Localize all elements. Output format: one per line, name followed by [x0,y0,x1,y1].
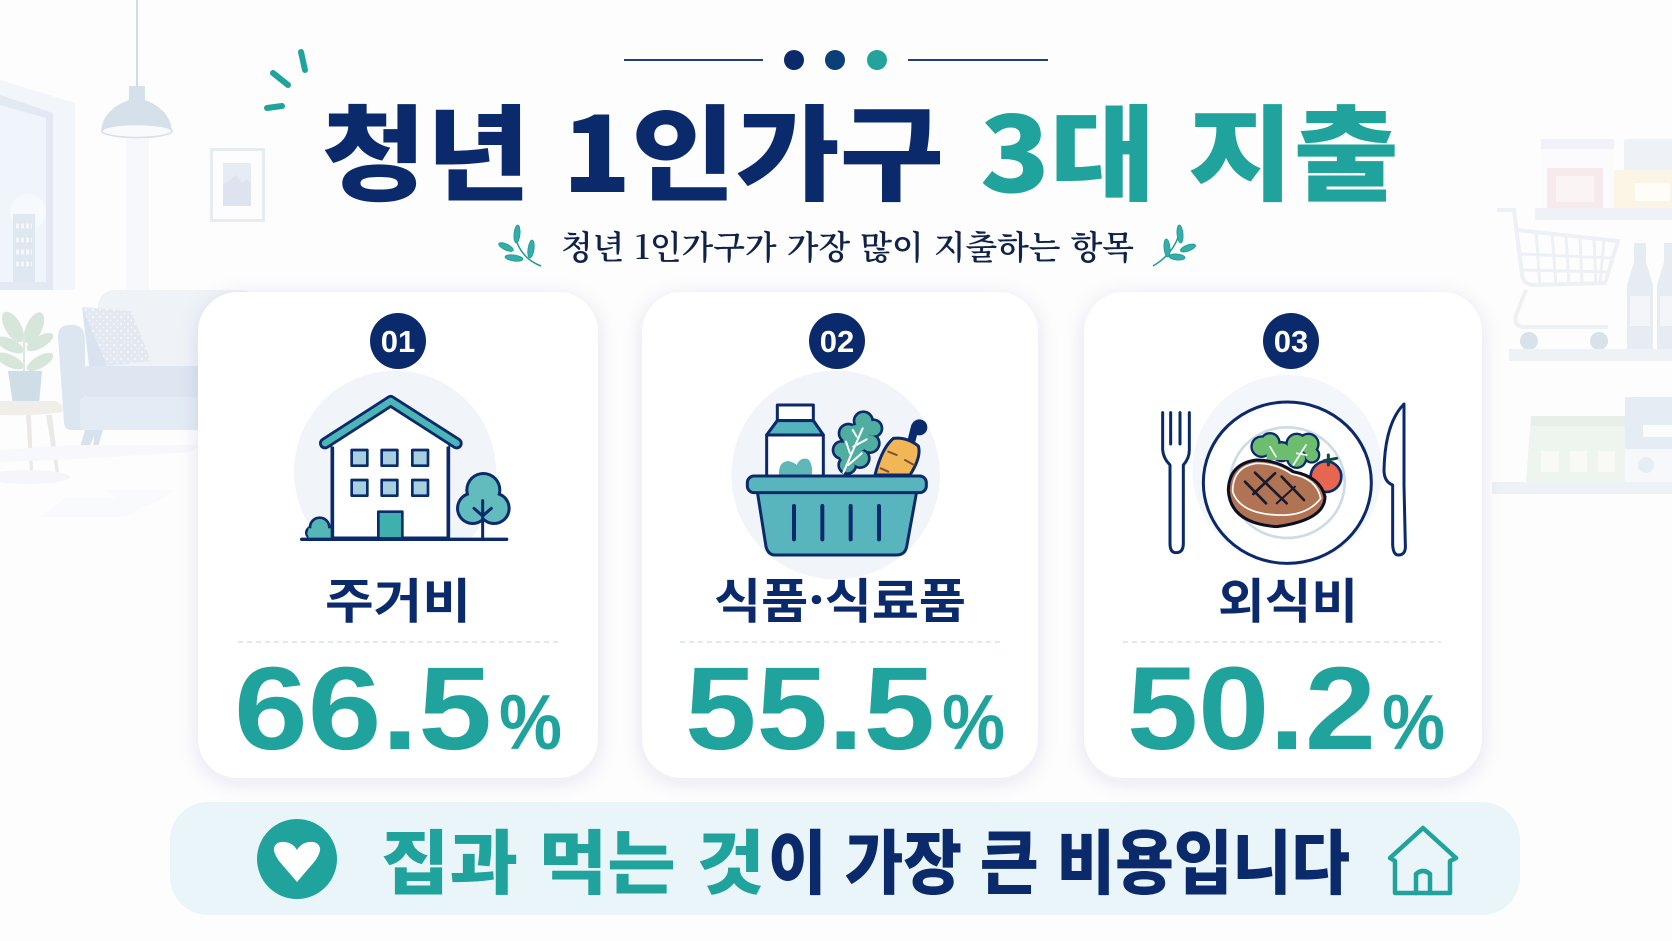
subtitle: 청년 1인가구가 가장 많이 지출하는 항목 [561,222,1134,269]
panel: 주거비 [198,292,598,778]
sparkle marks [267,52,305,108]
callout banner [170,802,1520,915]
shopping cart [1497,210,1618,350]
bottles [1627,243,1672,349]
label: 주거비 [325,562,471,632]
callout text: 집과 먹는 것 [381,808,765,909]
value: % [1382,678,1445,766]
number badge 02 [809,313,865,369]
number badge 03 [1263,313,1319,369]
panel: 외식비 [1084,292,1482,778]
potted plant and side table [0,308,200,517]
value: % [499,678,562,766]
lower shelf products [1492,397,1672,494]
callout text: 이 가장 큰 비용입니다 [768,808,1350,909]
number badge 01 [370,313,426,369]
middle shelf [1509,349,1672,361]
wall picture [212,150,264,220]
title [322,71,1399,222]
window [0,80,75,290]
lamp [101,0,172,290]
icon: right laurel sprig [1153,225,1197,266]
number badge 03: 03 [1274,324,1308,359]
top shelf products [1535,139,1672,220]
value: 55.5 [685,643,935,775]
icon: grocery basket [731,371,940,579]
icon: heart [257,819,337,899]
panel: 식품·식료품 [642,292,1038,778]
value: % [942,678,1005,766]
title: 청년 1인가구 [322,71,944,222]
header ornament: lines and three dots [624,50,1048,70]
label: 식품·식료품 [714,562,966,632]
background illustration: living room [0,0,264,517]
callout text [381,808,1350,909]
icon: left laurel sprig [497,225,541,266]
sofa [58,290,258,458]
label: 외식비 [1218,562,1358,632]
title: 3대 지출 [980,71,1399,222]
number badge 02: 02 [820,324,854,359]
background illustration: grocery shelves [1492,139,1672,494]
value: 50.2 [1127,643,1376,775]
value: 66.5 [234,643,492,775]
number badge 01: 01 [381,324,415,359]
icon: plate with steak, fork and knife [1163,375,1405,565]
icon: house outline [1390,828,1456,893]
icon: apartment house [294,370,511,541]
